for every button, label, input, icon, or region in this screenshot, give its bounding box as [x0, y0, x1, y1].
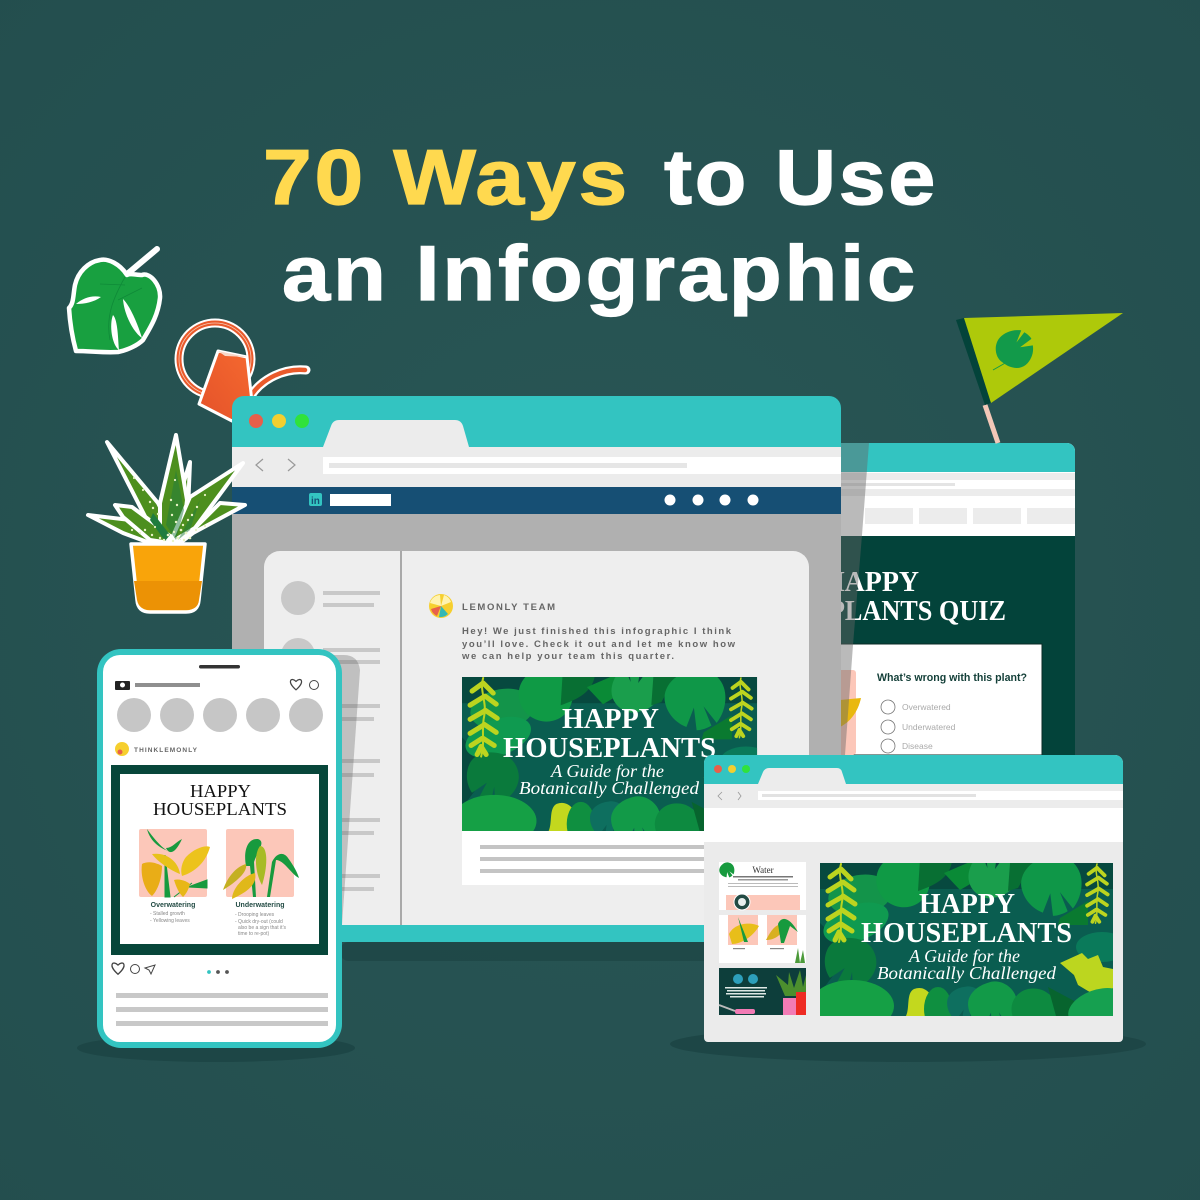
post action icons: [112, 963, 155, 974]
featured banner image: [810, 845, 1131, 1042]
illustration: underwatered plant: [223, 829, 299, 899]
thumbnail: water: [717, 860, 806, 910]
post image: [111, 765, 328, 955]
avatar: [115, 742, 129, 756]
post image: HAPPY: [190, 781, 251, 801]
account name: THINKLEMONLY: [134, 747, 198, 754]
browser tab: [323, 420, 469, 447]
toolbar: [704, 784, 1123, 808]
thumbnail: water: Water: [752, 865, 774, 875]
title: to Use: [664, 133, 938, 221]
quiz tab buttons: [865, 508, 1075, 524]
icon: watering can sticker: [179, 323, 306, 421]
sidebar profile: [281, 581, 380, 891]
post banner image: HOUSEPLANTS: [503, 733, 716, 764]
quiz question card: Overwatered: [902, 702, 951, 712]
panel: main LinkedIn browser window: [232, 396, 841, 942]
quiz question card: [800, 644, 1042, 755]
captions: - Quick dry-out (could: [235, 919, 283, 925]
feed panel: [264, 551, 809, 925]
post message: [461, 626, 736, 662]
post image: HOUSEPLANTS: [153, 799, 287, 819]
thumbnail: plants: [719, 915, 806, 963]
notification icons: [290, 679, 318, 690]
quiz title: HAPPY: [823, 567, 919, 598]
quiz dark body: [800, 536, 1075, 755]
story circles: [117, 698, 323, 732]
panel: SlideShare-style browser window: [704, 755, 1131, 1042]
featured banner image: HAPPY: [919, 888, 1015, 920]
post caption lines: [462, 831, 757, 885]
featured banner image: HOUSEPLANTS: [861, 917, 1072, 949]
icon: monstera leaf sticker: [69, 249, 160, 352]
tab: [758, 768, 846, 784]
title: an Infographic: [282, 229, 918, 317]
post banner image: Botanically Challenged: [519, 778, 700, 798]
quiz question card: Disease: [902, 741, 933, 751]
post message: you’ll love. Check it out and let me know how: [462, 639, 736, 650]
captions: also be a sign that it’s: [238, 925, 286, 931]
thumbnail: dark care tips: [719, 968, 806, 1015]
post message: Hey! We just finished this infographic I think: [462, 626, 732, 637]
featured banner image: A Guide for the: [908, 946, 1020, 966]
traffic lights: [714, 765, 750, 773]
captions: time to re-pot): [238, 931, 269, 937]
captions: [150, 902, 286, 937]
browser traffic lights: [249, 414, 309, 428]
post message: we can help your team this quarter.: [461, 651, 674, 662]
translucent shadow of main browser: [841, 443, 869, 755]
LinkedIn nav bar: in: [311, 496, 320, 507]
captions: - Stalled growth: [150, 911, 185, 917]
avatar: lemon: [429, 594, 453, 618]
captions: - Yellowing leaves: [150, 918, 190, 924]
white header strip: [704, 808, 1123, 842]
captions: Underwatering: [235, 902, 285, 909]
post author: LEMONLY TEAM: [462, 602, 555, 613]
ground shadows: [77, 942, 1146, 1062]
icon: pennant flag: [956, 313, 1123, 443]
phone speaker: [199, 665, 240, 668]
post banner image: [452, 659, 775, 857]
quiz title: [737, 567, 1006, 627]
post caption lines: [116, 993, 328, 1026]
quiz question card: What’s wrong with this plant?: [877, 672, 1027, 684]
LinkedIn nav bar: [232, 487, 841, 514]
post banner image: HAPPY: [562, 704, 659, 735]
gray page area: [232, 514, 841, 925]
featured banner image: Botanically Challenged: [877, 963, 1057, 983]
illustration: overwatered plant: [139, 829, 210, 897]
carousel dots: [207, 970, 229, 974]
browser toolbar: [232, 447, 841, 487]
post banner image: A Guide for the: [550, 761, 664, 781]
quiz title: HOUSEPLANTS QUIZ: [737, 596, 1006, 627]
phone shadow on panel: [300, 655, 360, 925]
title: [263, 133, 938, 317]
panel: quiz browser window: [737, 443, 1075, 755]
camera icon and bar: [115, 681, 200, 690]
captions: - Drooping leaves: [235, 912, 275, 918]
quiz question card: Underwatered: [902, 722, 956, 732]
panel: Instagram phone: [97, 649, 342, 1048]
icon: aloe plant in orange pot: [88, 435, 245, 612]
title: 70 Ways: [263, 133, 630, 221]
captions: Overwatering: [151, 902, 195, 909]
